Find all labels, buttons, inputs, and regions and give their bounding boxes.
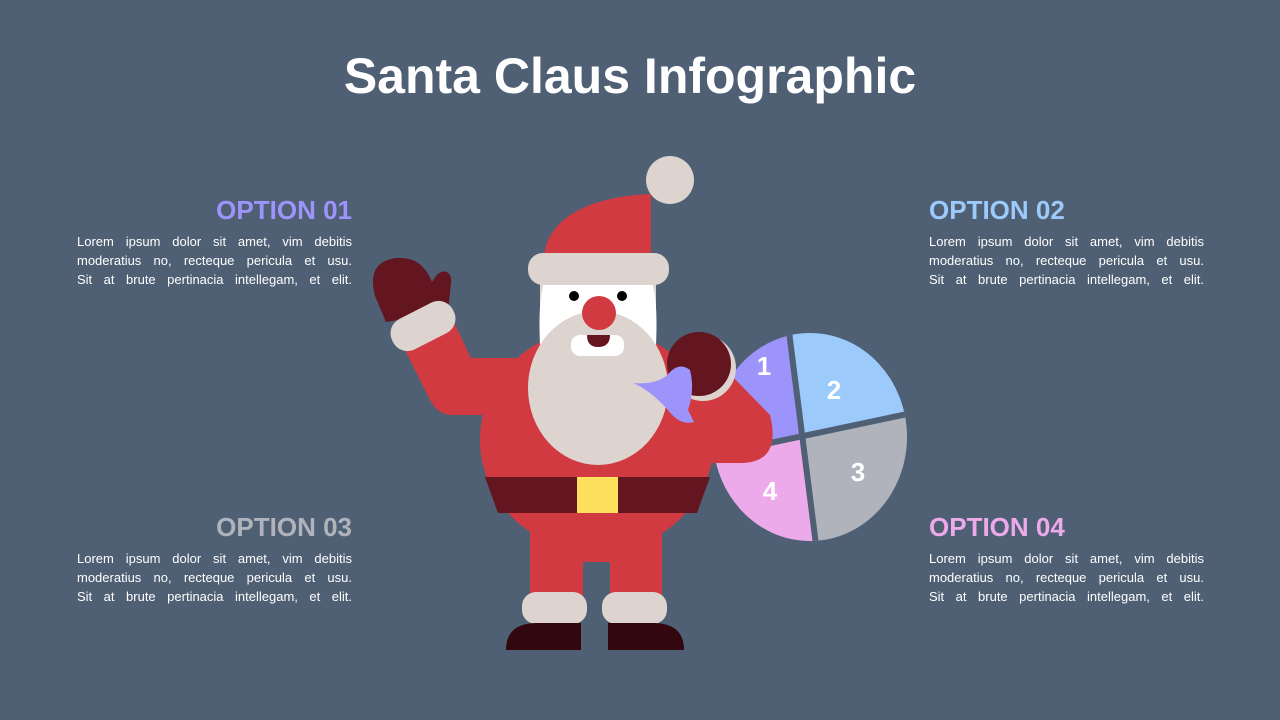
body text (929, 551, 1204, 604)
body text (77, 234, 352, 287)
body text (929, 234, 1204, 287)
option 03 text block (77, 512, 352, 604)
sack pie chart: 1 (757, 351, 771, 381)
heading: option 01: OPTION 01 (216, 195, 352, 225)
body text: Lorem ipsum dolor sit amet, vim debitis (77, 234, 352, 249)
hat (528, 156, 694, 285)
sack pie chart (716, 333, 907, 541)
heading: option 04: OPTION 04 (929, 512, 1065, 542)
body text: Sit at brute pertinacia intellegam, et elit. (77, 589, 352, 604)
body (480, 328, 714, 552)
boots (506, 592, 684, 650)
body text: Lorem ipsum dolor sit amet, vim debitis (929, 234, 1204, 249)
body text: moderatius no, recteque pericula et usu. (77, 570, 352, 585)
body text (77, 551, 352, 604)
body text: Sit at brute pertinacia intellegam, et elit. (77, 272, 352, 287)
heading: option 03: OPTION 03 (216, 512, 352, 542)
body text: Sit at brute pertinacia intellegam, et elit. (929, 589, 1204, 604)
santa illustration (372, 156, 907, 650)
title: Santa Claus Infographic (344, 48, 916, 104)
head: face and beard (528, 280, 668, 465)
body text: moderatius no, recteque pericula et usu. (929, 253, 1204, 268)
left arm waving (373, 258, 530, 415)
body text: moderatius no, recteque pericula et usu. (929, 570, 1204, 585)
body text: Lorem ipsum dolor sit amet, vim debitis (929, 551, 1204, 566)
heading: option 02: OPTION 02 (929, 195, 1065, 225)
belt (485, 477, 710, 513)
option 01 text block (77, 195, 352, 287)
right arm holding sack (655, 332, 773, 463)
sack pie chart: 2 (827, 375, 841, 405)
option 02 text block (929, 195, 1204, 287)
body text: moderatius no, recteque pericula et usu. (77, 253, 352, 268)
body text: Lorem ipsum dolor sit amet, vim debitis (77, 551, 352, 566)
sack pie chart: 3 (851, 457, 865, 487)
legs (530, 500, 662, 602)
option 04 text block (929, 512, 1204, 604)
sack tie scarf (633, 366, 694, 423)
sack pie chart: 4 (763, 476, 778, 506)
body text: Sit at brute pertinacia intellegam, et elit. (929, 272, 1204, 287)
